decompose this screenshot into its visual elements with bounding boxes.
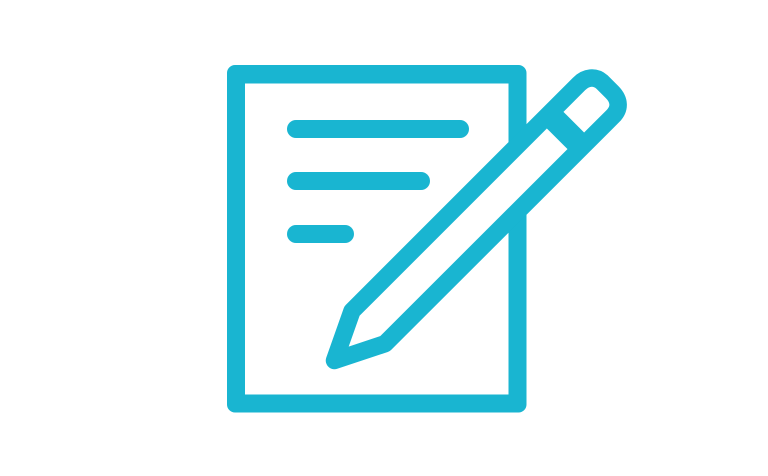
short text line: [296, 225, 345, 243]
icon: pencil: [334, 78, 618, 360]
pencil ferrule band: [548, 114, 582, 147]
long text line: [296, 120, 460, 138]
medium text line: [296, 172, 421, 190]
icon: document page outline: [227, 65, 526, 412]
pencil body and tip: [334, 78, 618, 360]
text lines on the document: [296, 129, 460, 234]
